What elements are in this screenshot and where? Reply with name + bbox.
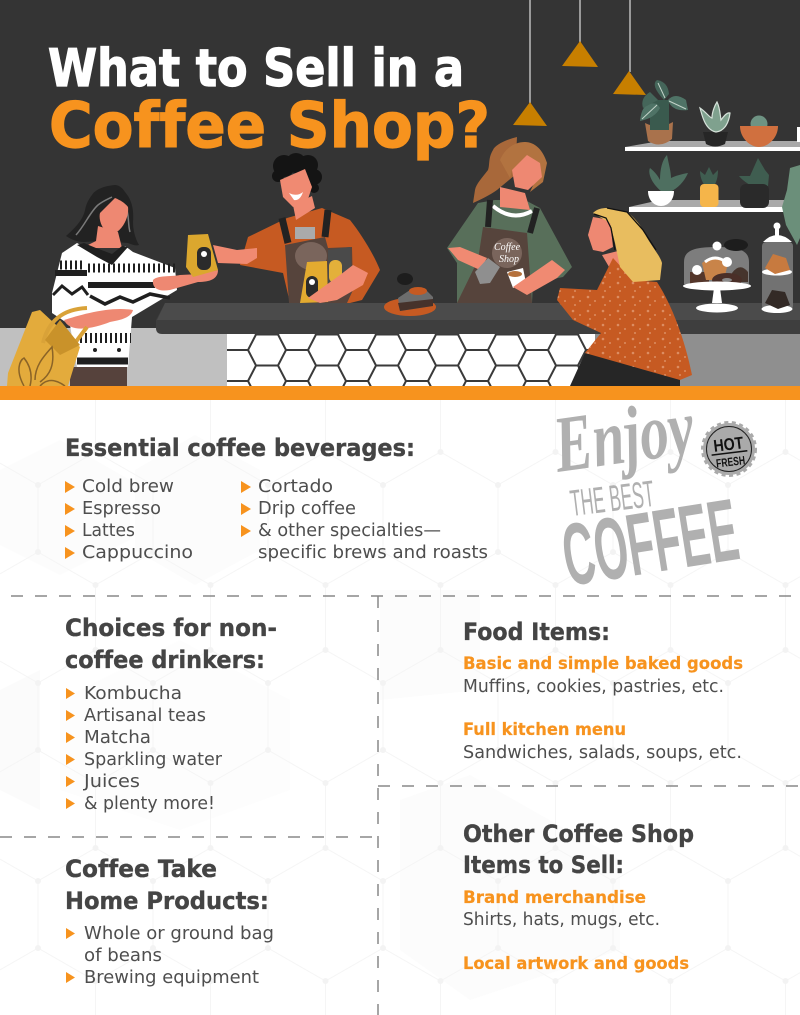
list left: Cold brew [82, 477, 174, 497]
glass pastry jar [762, 222, 793, 313]
coffee bag in hand [186, 234, 218, 277]
tote bag [7, 308, 87, 386]
shelves with plants [625, 80, 800, 245]
background hexagon texture [0, 400, 800, 1015]
dashed dividers [0, 596, 800, 1015]
bullet markers [66, 688, 75, 809]
kitchen menu: Sandwiches, salads, soups, etc. [463, 743, 742, 763]
list: Whole or ground bag [84, 924, 274, 944]
brand merchandise [463, 888, 660, 930]
title: Coffee Shop? [49, 89, 490, 162]
list: Sparkling water [84, 750, 223, 770]
heading: Home Products: [65, 887, 269, 915]
counter top [156, 303, 800, 334]
brand merchandise: Brand merchandise [463, 888, 646, 908]
hot and fresh stamp [702, 422, 756, 476]
product bags on counter [300, 247, 353, 303]
panel: non-coffee drinks [65, 614, 277, 814]
floor left [0, 328, 227, 386]
floor right [595, 334, 800, 386]
list right: Cortado [258, 477, 333, 497]
baked goods: Basic and simple baked goods [463, 654, 743, 674]
list: Brewing equipment [84, 968, 259, 988]
list left: Lattes [82, 521, 135, 541]
hero wall [0, 0, 800, 386]
list right [258, 477, 488, 563]
kitchen menu: Full kitchen menu [463, 720, 626, 740]
lettering [548, 383, 745, 605]
list left [82, 477, 193, 563]
barista pouring latte art [447, 137, 572, 303]
heading [463, 820, 694, 879]
heading [65, 855, 269, 915]
seated customer with blonde hair [557, 208, 692, 386]
lettering: THE BEST [568, 473, 656, 524]
heading: Food Items: [463, 618, 610, 646]
list right: Drip coffee [258, 499, 356, 519]
hot and fresh stamp: HOT [712, 433, 745, 456]
baked goods [463, 654, 743, 697]
kitchen menu [463, 720, 742, 763]
list right: & other specialties— [258, 521, 441, 541]
heading: Coffee Take [65, 855, 217, 883]
counter front with hexagon tiles [227, 334, 595, 386]
orange band [0, 386, 800, 400]
list: Kombucha [84, 684, 182, 704]
plant: yellow pot [700, 167, 718, 207]
list [84, 924, 274, 988]
panel: food items [463, 618, 743, 763]
bullet markers [65, 481, 251, 559]
list: Juices [83, 772, 140, 792]
plant: aloe [700, 102, 730, 146]
apron logo: Coffee [494, 242, 521, 253]
pendant lamps [513, 0, 646, 126]
logo: enjoy the best coffee [548, 383, 756, 605]
milk pitcher [475, 258, 500, 284]
heading: Essential coffee beverages: [65, 434, 415, 462]
list: Artisanal teas [84, 706, 206, 726]
cake on plate [384, 273, 436, 316]
barista holding coffee bag [186, 153, 380, 303]
list [83, 684, 223, 814]
apron logo: Shop [499, 254, 519, 265]
lettering: Enjoy [548, 383, 699, 490]
hero illustration: coffee shop scene [0, 0, 800, 386]
panel: other items to sell [463, 820, 694, 974]
white cup on shelf [797, 127, 800, 142]
title [48, 39, 490, 162]
heading: Items to Sell: [463, 851, 624, 879]
baked goods: Muffins, cookies, pastries, etc. [463, 677, 724, 697]
customer with patterned sweater [7, 185, 218, 386]
heading [65, 614, 277, 674]
list left: Espresso [82, 499, 161, 519]
apron logo [494, 242, 521, 265]
plant: snake plant [648, 155, 688, 206]
plant: large leaf [640, 80, 688, 145]
list right: specific brews and roasts [258, 543, 488, 563]
list: & plenty more! [84, 794, 215, 814]
curly hair [272, 153, 322, 193]
cake stand under dome [683, 239, 751, 312]
hot and fresh stamp: FRESH [715, 453, 746, 471]
plant: dark pot [739, 158, 769, 208]
hanging plant [782, 165, 800, 245]
latte cup [507, 268, 526, 288]
list: Matcha [84, 728, 151, 748]
list left: Cappuccino [82, 543, 193, 563]
plant: cactus bowl [740, 116, 778, 147]
list: of beans [84, 946, 162, 966]
local artwork: Local artwork and goods [463, 954, 689, 974]
heading: coffee drinkers: [65, 646, 265, 674]
heading: Choices for non- [65, 614, 277, 642]
title: What to Sell in a [48, 39, 464, 99]
brand merchandise: Shirts, hats, mugs, etc. [463, 910, 660, 930]
heading: Other Coffee Shop [463, 820, 694, 848]
bullet markers [66, 928, 75, 983]
panel: coffee take home products [65, 855, 274, 988]
panel: essential coffee beverages [65, 434, 488, 563]
